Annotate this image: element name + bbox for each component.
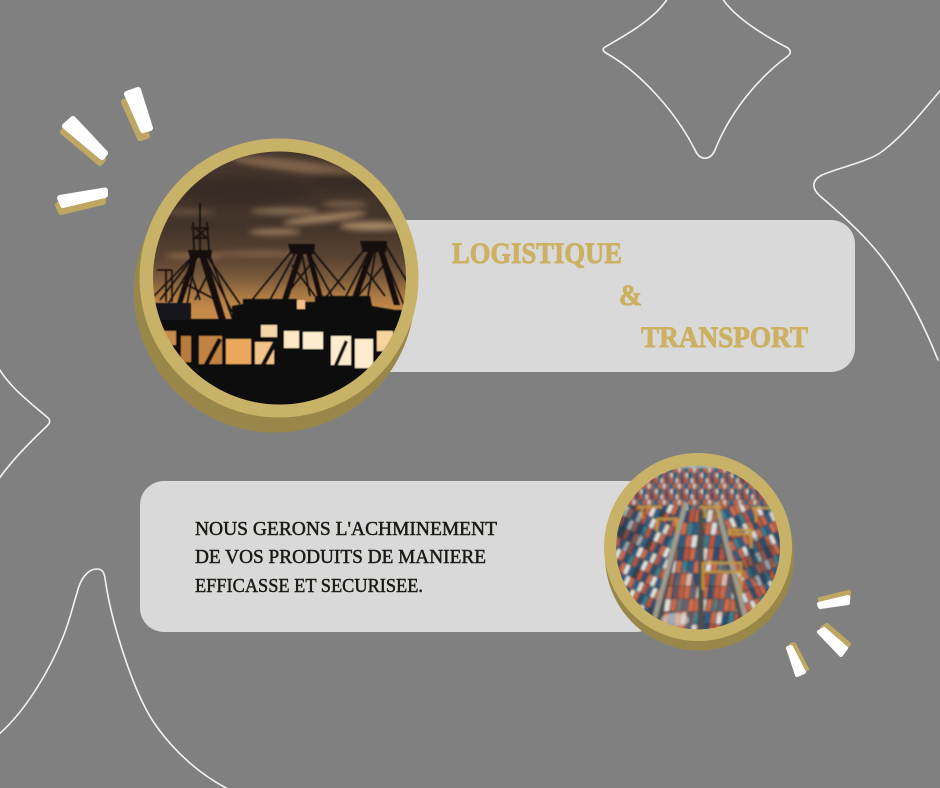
- left gantry body: [155, 303, 191, 320]
- medallion shadow: [134, 152, 415, 432]
- outline: right edge wave: [814, 85, 940, 360]
- medallion ring: [604, 453, 792, 641]
- description text: EFFICASSE ET SECURISEE.: [195, 575, 423, 597]
- spark highlights: [788, 597, 848, 675]
- title text: [452, 237, 808, 354]
- description text: [195, 518, 497, 597]
- lit gaps under the deck: [163, 300, 393, 368]
- medallion ring: [140, 138, 418, 418]
- description text: DE VOS PRODUITS DE MANIERE: [195, 546, 486, 568]
- outline: star top right: [603, 0, 790, 158]
- title text: TRANSPORT: [641, 321, 808, 354]
- panel background: [330, 220, 855, 372]
- photo medallion: container terminal: [604, 453, 794, 650]
- tonal variation: [616, 508, 774, 630]
- yard blocks: [616, 503, 683, 616]
- title text: LOGISTIQUE: [452, 237, 622, 270]
- sparks: bottom right: [788, 592, 849, 675]
- outline: left edge wave: [0, 367, 50, 480]
- title text: &: [619, 279, 642, 312]
- spark shadows: [58, 98, 147, 212]
- distant yard: [628, 466, 768, 513]
- panel: title: [330, 220, 855, 372]
- spark highlights: [60, 90, 150, 205]
- yellow gantries: [638, 507, 775, 596]
- outline: bottom left hill: [0, 569, 230, 788]
- roads: [654, 500, 746, 632]
- description text: NOUS GERONS L'ACHMINEMENT: [195, 518, 497, 540]
- spark shadows: [791, 592, 849, 672]
- sparks: top left: [58, 90, 150, 212]
- photo medallion: port cranes at sunset: [134, 138, 418, 432]
- photo: crane silhouettes: [150, 150, 412, 410]
- panel: description: [140, 481, 660, 632]
- panel background: [140, 481, 660, 632]
- photo: container yard from above: [616, 466, 780, 630]
- dark deck and quay mass: [160, 295, 402, 404]
- crane masts and cables: [154, 203, 412, 320]
- medallion shadow: [605, 462, 794, 650]
